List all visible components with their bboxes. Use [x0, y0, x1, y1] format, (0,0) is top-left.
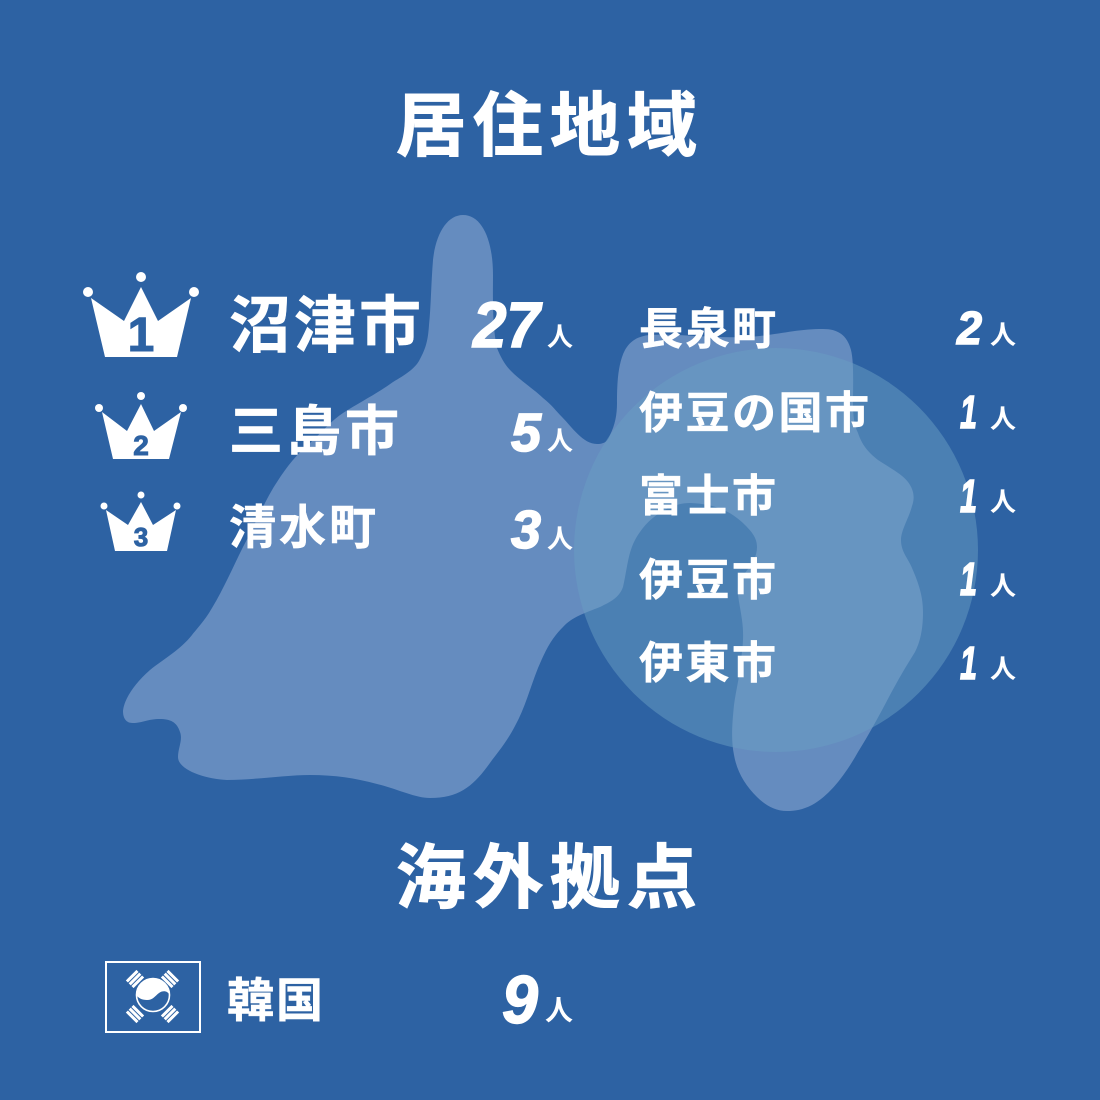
row: Izu: 1	[960, 553, 977, 605]
icon: crown 2: 2	[133, 430, 149, 461]
label: Numazu: 沼津市	[229, 292, 424, 361]
row: Izunokuni: 1	[960, 386, 977, 438]
row: Izu: 伊豆市	[639, 556, 778, 605]
row: Nagaizumi: 2	[956, 302, 982, 354]
row: Izu	[639, 553, 1016, 605]
unit: 人	[547, 426, 573, 456]
row: Fuji: 1	[960, 470, 977, 522]
unit: 人	[547, 524, 573, 554]
row: Nagaizumi	[639, 302, 1016, 354]
unit: 人	[547, 322, 573, 352]
value: 9: 9	[502, 962, 538, 1038]
row: Izunokuni: 人	[990, 404, 1016, 434]
icon: crown 1: 1	[128, 309, 154, 362]
circle: highlight	[574, 348, 978, 752]
row: Ito: 伊東市	[639, 639, 778, 688]
value: 27: 27	[472, 289, 543, 361]
icon: crown 3	[100, 492, 180, 552]
label: Korea: 韓国	[227, 974, 325, 1027]
row: Fuji	[639, 470, 1016, 522]
map: Shizuoka silhouette	[123, 215, 923, 811]
icon: crown 1	[83, 272, 199, 362]
icon: Korean flag	[106, 962, 200, 1032]
unit: 人	[545, 995, 573, 1026]
row: Nagaizumi: 長泉町	[639, 305, 778, 354]
right list	[639, 302, 1016, 689]
icon: crown 3: 3	[134, 522, 148, 552]
row: Ito	[639, 637, 1016, 689]
row: Nagaizumi: 人	[990, 320, 1016, 350]
row: Izunokuni: 伊豆の国市	[639, 389, 872, 438]
row: Izu: 人	[990, 571, 1016, 601]
rank 1 row	[83, 272, 573, 362]
rank 2 row	[95, 392, 573, 463]
heading: overseas bases: 海外拠点	[396, 839, 704, 917]
label: Mishima: 三島市	[229, 402, 403, 462]
row: Izunokuni	[639, 386, 1016, 438]
value: 5: 5	[511, 403, 542, 463]
icon: crown 2	[95, 392, 187, 461]
row: Fuji: 人	[990, 487, 1016, 517]
label: Shimizu: 清水町	[229, 501, 379, 554]
row: Fuji: 富士市	[639, 472, 778, 521]
row: Ito: 人	[990, 654, 1016, 684]
value: 3: 3	[511, 500, 541, 560]
rank 3 row	[100, 492, 573, 560]
title: residence area: 居住地域	[396, 87, 704, 165]
row: Ito: 1	[960, 637, 977, 689]
